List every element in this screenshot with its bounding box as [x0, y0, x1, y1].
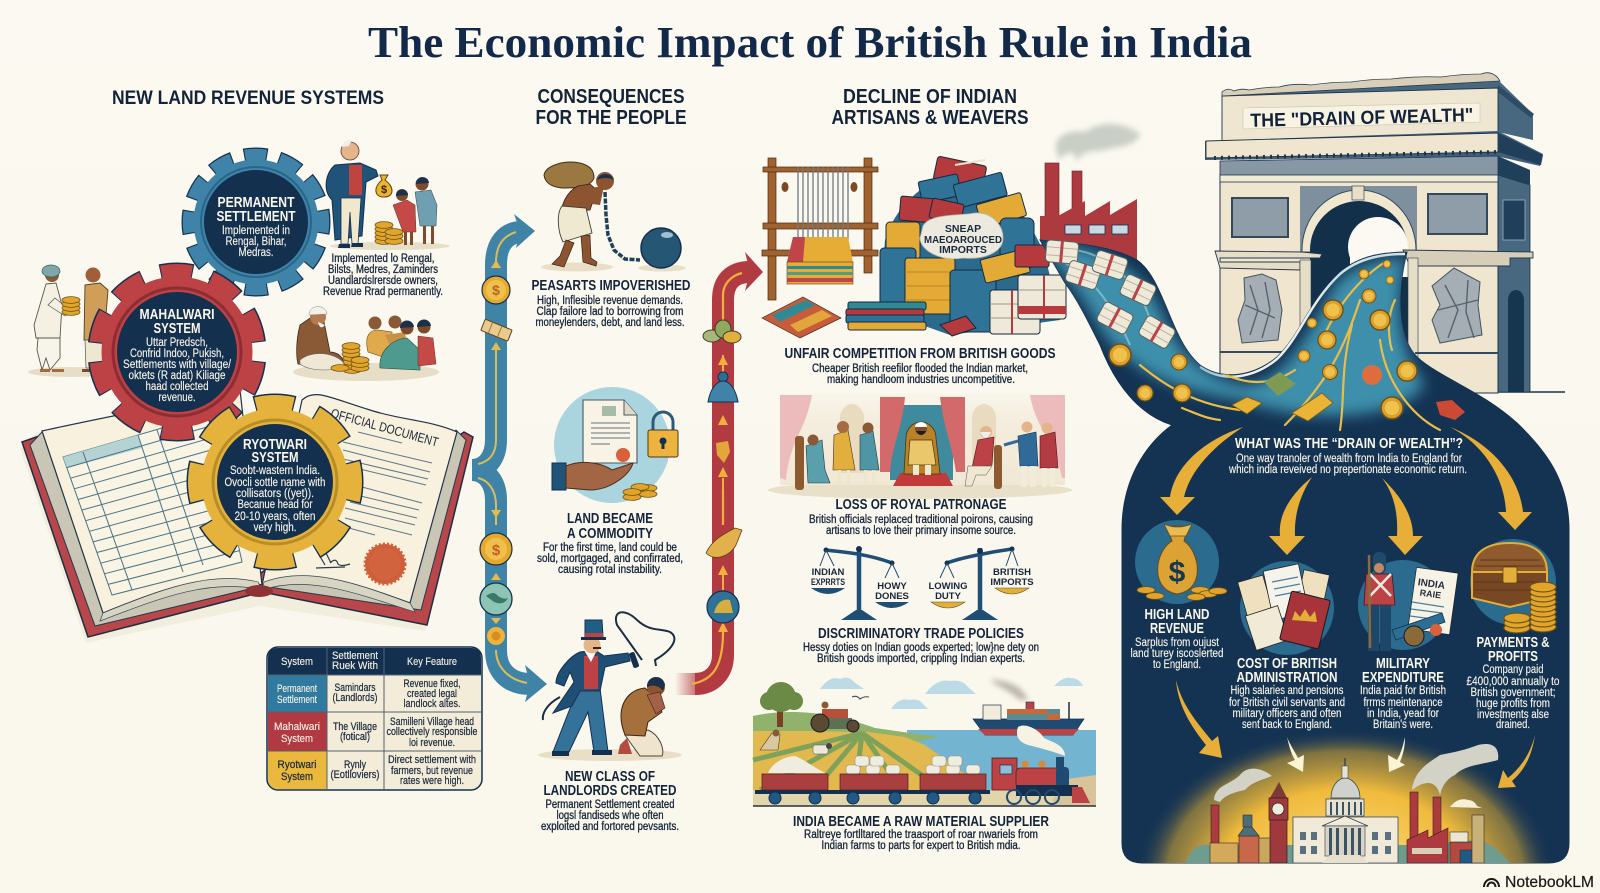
illustration: British official and villagers [326, 140, 450, 250]
heading: decline of artisans: ARTISANS & WEAVERS [832, 107, 1028, 129]
table: comparison of systems: Ruek With [332, 660, 378, 672]
arrow: white from administration [1287, 737, 1304, 772]
text: high land revenue: REVENUE [1150, 621, 1204, 637]
text: peasants impoverished: Clap failore lad to borrowing from [536, 306, 684, 318]
illustration: right balance scale: IMPORTS [990, 577, 1034, 588]
ship [973, 679, 1084, 735]
icon: money bag: $ [1169, 556, 1186, 589]
label: official document: OFFICIAL DOCUMENT [329, 405, 440, 450]
illustration: left balance scale [811, 546, 909, 620]
illustration: rug [762, 297, 841, 338]
arrow: to high land revenue [1160, 427, 1243, 515]
heading: consequences: CONSEQUENCES [538, 86, 684, 108]
text: what was the drain of wealth: One way tranoler of wealth from India to England for [1236, 453, 1462, 465]
smoke from train [1017, 725, 1065, 756]
table: comparison of systems: Direct settlement with [388, 754, 476, 766]
illustration: left balance scale: EXPRRTS [811, 577, 845, 588]
clock tower [1269, 782, 1288, 863]
icon: money bag: $ [381, 184, 387, 196]
ledger table [63, 414, 242, 595]
text: peasants impoverished: High, Inflesible revenue demands. [537, 295, 683, 307]
icon: treasure chest and coins [1470, 539, 1556, 633]
right buildings [1450, 815, 1484, 863]
bird [852, 696, 869, 699]
icon: chain [605, 192, 640, 260]
figure: yellow courtier [833, 421, 855, 486]
text: high land revenue: HIGH LAND [1144, 607, 1210, 623]
document lines [343, 432, 432, 535]
icon: wax seal [365, 544, 405, 584]
icon: globe [480, 583, 512, 615]
text: discriminatory trade policies: Hessy doties on Indian goods experted; low}ne dety on [803, 642, 1039, 654]
cloud [1450, 799, 1482, 808]
text: cost of british administration: COST OF BRITISH [1237, 656, 1337, 672]
illustration: right balance scale: LOWING [928, 581, 968, 592]
panel: consequences for the people [532, 86, 690, 833]
text: new class of landlords created: NEW CLASS OF [565, 769, 655, 785]
arrow: white from military [1388, 737, 1405, 772]
figure: blue British official [1004, 422, 1038, 487]
title: The Economic Impact of British Rule in India [368, 18, 1252, 67]
text: raw material supplier: INDIA BECAME A RAW MATERIAL SUPPLIER [793, 814, 1049, 830]
smoke [1214, 744, 1498, 802]
text: loss of royal patronage: artisans to love their primary insome source. [826, 525, 1016, 537]
arrow: to payments and profits [1450, 427, 1532, 530]
icon: coin on blue arrow: $ [492, 282, 500, 298]
text: peasants impoverished [532, 278, 690, 329]
illustration: triumphal arch [1205, 73, 1565, 400]
icon: soldier, cannon and document: RAIE [1419, 588, 1442, 600]
table: comparison of systems: (Landlords) [332, 692, 378, 704]
callout: cheap imports bubble: IMPORTS [939, 244, 987, 256]
icon: blue bust [708, 372, 738, 402]
callout: cheap imports bubble [920, 213, 1003, 259]
icon: gold in blue circle [707, 591, 739, 623]
table: comparison of systems: Key Feature [407, 656, 457, 668]
gear: ryotwari system: Ovocli sottle name with [224, 477, 326, 489]
text: what was the drain of wealth: WHAT WAS THE “DRAIN OF WEALTH”? [1235, 436, 1463, 452]
icon: coin on lower blue arrow: $ [492, 542, 501, 559]
text: land became a commodity: For the first time, land could be [543, 542, 677, 554]
icon: coin on lower blue arrow [480, 533, 512, 565]
arrow: red upward flow [675, 252, 763, 684]
icon: coin on blue arrow [482, 276, 510, 304]
icon: small coin [487, 627, 505, 645]
cow [813, 743, 832, 754]
gear: mahalwari system: Uttar Predsch, [146, 337, 208, 349]
panel: new land revenue systems [20, 88, 482, 790]
illustration: two men exchanging coins [28, 265, 112, 377]
arrow: yellow from payments [1498, 735, 1535, 788]
gear: permanent settlement: Medras. [238, 247, 274, 259]
illustration: landlord with whip over kneeling peasant [538, 612, 682, 761]
right factory [1407, 792, 1448, 863]
river cargo: bales [1045, 240, 1176, 350]
icon: slipper [706, 528, 742, 557]
callout: cheap imports bubble: SNEAP [945, 223, 981, 235]
table: comparison of systems: rates were high. [400, 775, 464, 787]
heading: consequences [536, 86, 686, 129]
text: payments and profits: drained. [1496, 719, 1530, 731]
table: comparison of systems: System [281, 771, 313, 783]
text: new class of landlords created: LANDLORDS CREATED [544, 783, 676, 799]
river cargo: coins [1109, 260, 1417, 419]
icon: soldier, cannon and document: INDIA [1417, 577, 1446, 592]
text: cost of british administration: ADMINISTRATION [1236, 670, 1338, 686]
gear: ryotwari system: Becanue head for [238, 499, 313, 511]
gear: permanent settlement: Rengal, Bihar, [226, 236, 286, 248]
tree [760, 682, 803, 727]
gear: permanent settlement: SETTLEMENT [216, 209, 296, 225]
text: new class of landlords created: logsl fandiseds whe often [556, 810, 664, 822]
illustration: factory with smoke [1040, 124, 1140, 262]
text: unfair competition: Cheaper British reefilor flooded the Indian market, [812, 363, 1028, 375]
table: comparison of systems: Rynly [344, 759, 366, 771]
river cargo: gold bars and gems [1232, 365, 1465, 421]
text: payments and profits: investments alse [1477, 709, 1549, 721]
table: comparison of systems: Settlement [277, 694, 317, 706]
text: military expenditure: frrms meintenance [1364, 697, 1442, 709]
text: military expenditure: India paid for British [1360, 685, 1446, 697]
sculpture: left [1238, 274, 1282, 343]
text: cost of british administration: sent back to England. [1242, 719, 1332, 731]
arrow: to cost of administration [1269, 477, 1312, 555]
signature [316, 551, 350, 568]
illustration: pile of British cloth [846, 156, 1066, 336]
table: comparison of systems: Mahalwari [274, 721, 320, 733]
text: land became a commodity: LAND BECAME [567, 511, 653, 527]
gear: ryotwari system: SYSTEM [252, 450, 298, 466]
table: comparison of systems: farmers, but revenue [391, 765, 473, 777]
table: comparison of systems: Settlement [332, 650, 378, 662]
text: what was the drain of wealth [1228, 436, 1467, 476]
left factory chimney [1211, 805, 1219, 845]
text: payments and profits: Company paid [1482, 664, 1544, 676]
gear: ryotwari system: very high. [254, 522, 296, 534]
gear: ryotwari system: Soobt-wastern India. [230, 465, 320, 477]
table: comparison of systems: System [281, 656, 313, 668]
text: cost of british administration: for British civil servants and [1229, 697, 1345, 709]
text: raw material supplier: Raltreye fortlltared the traasport of roar nwariels from [804, 829, 1038, 841]
text: land became a commodity [537, 511, 683, 576]
icon: green stones [703, 320, 741, 343]
text: high land revenue [1130, 607, 1224, 671]
text: payments and profits: PROFITS [1488, 649, 1538, 665]
gear: ryotwari system: collisators ((yet)). [236, 488, 314, 500]
table: comparison of systems: landlock altes. [404, 698, 460, 710]
icon: administration papers [1238, 561, 1334, 655]
text: raw material supplier: Indian farms to parts for expert to British mdia. [822, 840, 1020, 852]
gear: mahalwari system: Confrid Indoo, Pukish, [130, 348, 224, 360]
gear: mahalwari system: SYSTEM [154, 321, 200, 337]
text: cost of british administration [1229, 656, 1345, 731]
arrow: yellow from high land revenue [1176, 680, 1222, 758]
illustration: right balance scale: BRITISH [993, 567, 1031, 578]
table: comparison of systems: Samilleni Village head [390, 716, 474, 728]
arrow: to military expenditure [1382, 478, 1423, 555]
table: comparison of systems: loi revenue. [409, 737, 455, 749]
icon: padlock [648, 412, 678, 457]
text: high land revenue: land turey iscoslerted [1130, 648, 1224, 660]
gear: ryotwari system [196, 403, 354, 561]
train wagons [755, 756, 990, 804]
farmer [760, 730, 780, 750]
illustration: open ledger book [20, 390, 473, 643]
river edge highlight [1200, 254, 1405, 377]
icon: money bag [1135, 520, 1227, 604]
text: loss of royal patronage: British officials replaced traditional poirons, causing [809, 514, 1033, 526]
text: military expenditure: in India, yead for [1367, 708, 1439, 720]
illustration: loom [762, 158, 878, 300]
capitol building [1293, 758, 1398, 863]
text: military expenditure: EXPENDITURE [1362, 670, 1444, 686]
gear: permanent settlement: PERMANENT [218, 195, 295, 211]
figure: red British official [1040, 422, 1058, 487]
table: comparison of systems [267, 647, 482, 790]
table: comparison of systems: (fotical) [340, 731, 370, 743]
panel: decline of Indian artisans and weavers [753, 86, 1140, 852]
text: land became a commodity: sold, mortgaged, and confirrated, [537, 553, 683, 565]
table: comparison of systems: Revenue fixed, [404, 678, 460, 690]
gear: mahalwari system: oktets (R adat) Kiliage [128, 370, 226, 382]
icon: iron ball [641, 228, 681, 268]
text: high land revenue: to England. [1153, 659, 1201, 671]
gear: mahalwari system: revenue. [158, 392, 196, 404]
gear: mahalwari system: Settlements with village/ [123, 359, 232, 371]
text: unfair competition: UNFAIR COMPETITION FROM BRITISH GOODS [784, 346, 1056, 362]
panel: drain of wealth river and dark panel [1040, 240, 1569, 863]
text: peasants impoverished: PEASARTS IMPOVERISHED [532, 278, 690, 294]
text: new class of landlords created: exploited and fortored pevsants. [541, 821, 679, 833]
tractor [811, 702, 859, 732]
text: military expenditure: Britain's were. [1373, 719, 1433, 731]
text: permanent settlement note: Implemented lo Rengal, [332, 253, 434, 265]
icon: land deed [481, 319, 512, 341]
table: comparison of systems: Permanent [277, 683, 317, 695]
table: comparison of systems: (Eotlloviers) [330, 769, 380, 781]
text: land became a commodity: causing rotal instability. [558, 564, 662, 576]
text: payments and profits [1466, 635, 1560, 731]
illustration: peasant with sack and ball and chain [541, 162, 686, 272]
text: cost of british administration: military officers and often [1232, 708, 1342, 720]
arrow: blue branching flow [472, 214, 547, 702]
table: comparison of systems: System [281, 733, 313, 745]
figure: teal courtier [860, 422, 879, 486]
gear: ryotwari system: 20-10 years, often [234, 511, 316, 523]
gear: mahalwari system [97, 272, 257, 432]
illustration: right balance scale [928, 546, 1034, 620]
text: loss of royal patronage: LOSS OF ROYAL PATRONAGE [836, 497, 1007, 513]
illustration: glowing London skyline [1125, 680, 1565, 863]
icon: coin stacks [375, 222, 403, 244]
icon: coin stack [623, 484, 657, 500]
gear: mahalwari system: MAHALWARI [140, 307, 214, 323]
heading: new land revenue systems: NEW LAND REVENUE SYSTEMS [112, 88, 384, 109]
sculpture: right [1432, 268, 1482, 343]
text: new class of landlords created [541, 769, 679, 833]
gear: mahalwari system: haad collected [146, 381, 208, 393]
table: comparison of systems: created legal [407, 688, 457, 700]
left buildings [1210, 815, 1271, 863]
text: discriminatory trade policies [803, 626, 1039, 665]
icon: soldier, cannon and document [1358, 552, 1458, 651]
illustration: land deed, lock and hand [552, 387, 678, 503]
icon: gold nugget [716, 441, 730, 463]
text: permanent settlement note: Revenue Rrad permanently. [323, 286, 443, 298]
text: loss of royal patronage [809, 497, 1033, 537]
gear: permanent settlement: Implemented in [222, 225, 290, 237]
text: high land revenue: Sarplus from oujust [1135, 637, 1220, 649]
text: payments and profits: British government; [1470, 687, 1556, 699]
callout: cheap imports bubble: MAEOAROUCED [924, 234, 1002, 246]
clouds [820, 678, 1083, 709]
text: military expenditure: MILITARY [1376, 656, 1430, 672]
banner: the drain of wealth: THE "DRAIN OF WEALTH" [1250, 105, 1474, 132]
text: military expenditure [1360, 656, 1446, 731]
illustration: right balance scale: DUTY [935, 591, 962, 602]
text: cost of british administration: High salaries and pensions [1230, 685, 1344, 697]
table: comparison of systems: collectively responsible [386, 726, 478, 738]
heading: decline of artisans: DECLINE OF INDIAN [843, 86, 1017, 108]
table: comparison of systems: Samindars [334, 682, 376, 694]
text: unfair competition [784, 346, 1056, 386]
text: peasants impoverished: moneylenders, debt, and land less. [536, 317, 684, 329]
text: new class of landlords created: Permanent Settlement created [546, 799, 674, 811]
table: comparison of systems: The Village [333, 721, 377, 733]
heading: decline of artisans [832, 86, 1028, 129]
logo: NotebookLM: NotebookLM [1505, 874, 1594, 891]
text: payments and profits: £400,000 annually to [1466, 676, 1560, 688]
gear: permanent settlement [190, 156, 322, 288]
gear: ryotwari system: RYOTWARI [243, 437, 307, 453]
text: permanent settlement note: Uandlardslrersde owners, [328, 275, 438, 287]
text: land became a commodity: A COMMODITY [567, 526, 653, 542]
text: unfair competition: making handloom industries uncompetitive. [827, 374, 1015, 386]
text: discriminatory trade policies: DISCRIMINATORY TRADE POLICIES [818, 626, 1024, 642]
text: what was the drain of wealth: which india reveived no prepertionate economic return. [1228, 464, 1467, 476]
illustration: villagers with coins [293, 306, 439, 381]
illustration: left balance scale: INDIAN [812, 567, 844, 578]
heading: consequences: FOR THE PEOPLE [536, 107, 686, 129]
figure: seated British official [965, 426, 1002, 489]
illustration: royal court [768, 393, 1072, 499]
text: permanent settlement note: Bilsts, Medres, Zaminders [328, 264, 438, 276]
text: payments and profits: PAYMENTS & [1476, 635, 1550, 651]
text: discriminatory trade policies: British goods imported, crippling Indian experts. [817, 653, 1025, 665]
text: permanent settlement note [323, 253, 443, 298]
text: payments and profits: huge profits from [1476, 698, 1550, 710]
locomotive [992, 757, 1090, 804]
illustration: left balance scale: DONES [875, 591, 909, 602]
figure: seated teal courtier [795, 434, 830, 490]
table: comparison of systems: Ryotwari [278, 759, 316, 771]
illustration: farm, ship and railway [753, 678, 1096, 806]
illustration: left balance scale: HOWY [877, 581, 907, 592]
text: raw material supplier [793, 814, 1049, 852]
